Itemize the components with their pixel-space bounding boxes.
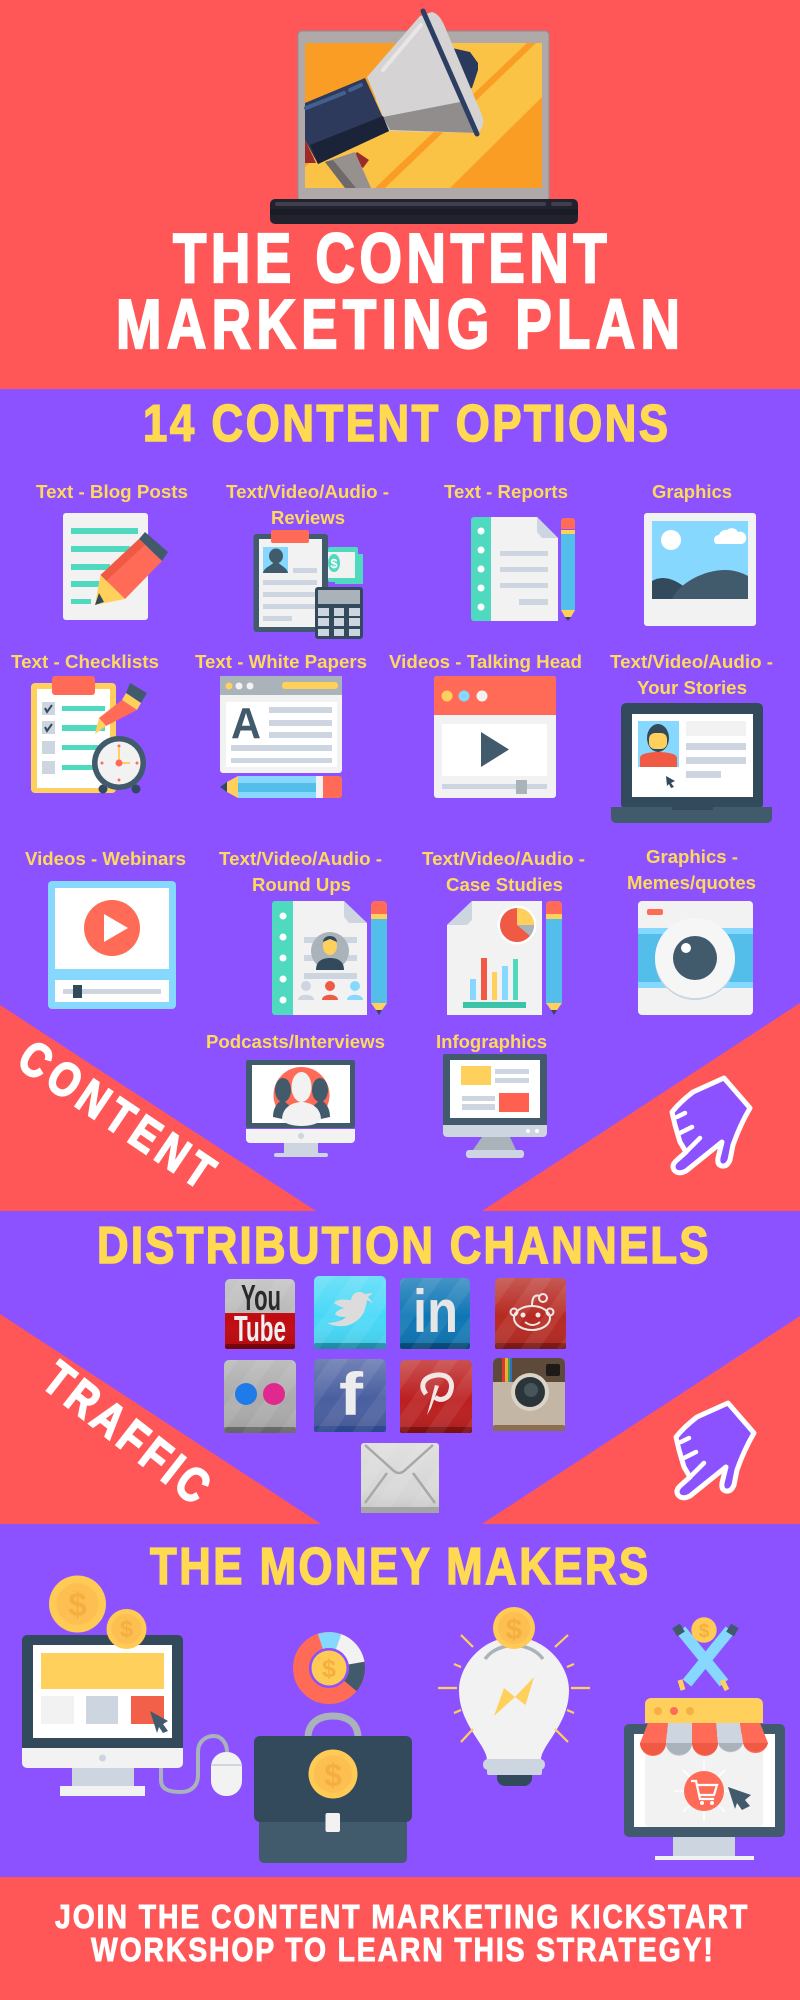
option: your stories: Text/Video/Audio - (610, 651, 773, 672)
icon: megaphone on laptop (270, 11, 578, 224)
option: reviews (226, 481, 389, 639)
banner: content triangle: CONTENT (9, 1030, 224, 1200)
option: case studies (422, 848, 585, 1015)
option: graphics (644, 481, 756, 626)
right triangle with hand icon (482, 1316, 800, 1524)
icon: online shop monitor with pencils and coin: $ (699, 1621, 710, 1642)
banner: traffic triangle: TRAFFIC (33, 1351, 220, 1514)
heading: distribution channels: DISTRIBUTION CHANNELS (97, 1218, 709, 1275)
icon: donut chart and briefcase: $ (324, 1757, 342, 1793)
option: checklists: Text - Checklists (11, 651, 159, 672)
title: THE CONTENT (173, 220, 607, 298)
panel: the money makers (0, 1524, 800, 1877)
option: your stories (610, 651, 773, 823)
icon: youtube: You (241, 1277, 281, 1318)
option: white papers: A (231, 699, 261, 748)
panel: footer call to action: WORKSHOP TO LEARN THIS STRATEGY! (91, 1931, 713, 1969)
option: checklists (11, 651, 159, 794)
option: round ups (219, 848, 387, 1015)
icon: small coin (106, 1609, 146, 1649)
option: graphics: Graphics (652, 481, 732, 502)
option: case studies: Text/Video/Audio - (422, 848, 585, 869)
option: memes and quotes: Graphics - (646, 846, 738, 867)
icon: donut chart and briefcase (254, 1632, 412, 1863)
option: blog posts: Text - Blog Posts (36, 481, 188, 502)
option: webinars (25, 848, 186, 1009)
option: webinars: Videos - Webinars (25, 848, 186, 869)
panel: 14 content options (0, 389, 800, 1211)
option: reports (444, 481, 575, 621)
heading: 14 content options: 14 CONTENT OPTIONS (143, 396, 668, 453)
option: reviews: Text/Video/Audio - (226, 481, 389, 502)
icon: online shop monitor with pencils and coin (624, 1617, 785, 1860)
option: reviews: Reviews (271, 507, 345, 528)
icon: small coin: $ (120, 1616, 133, 1642)
icon: desktop monitor with coins and mouse (22, 1576, 242, 1796)
title (116, 220, 680, 364)
option: talking head: Videos - Talking Head (389, 651, 582, 672)
icon: youtube (225, 1277, 295, 1349)
option: memes and quotes (627, 846, 756, 1015)
option: reports: Text - Reports (444, 481, 568, 502)
option: talking head (389, 651, 582, 798)
banner: traffic triangle (0, 1314, 321, 1524)
icon: pinterest (400, 1360, 472, 1433)
option: memes and quotes: Memes/quotes (627, 872, 756, 893)
option: blog posts (36, 481, 188, 620)
icon: twitter (314, 1276, 386, 1349)
icon: flickr (224, 1360, 296, 1433)
banner: content triangle (0, 1005, 316, 1211)
icon: facebook (314, 1359, 386, 1432)
icon: youtube: Tube (234, 1308, 286, 1349)
icon: email (361, 1443, 439, 1513)
icon: instagram (493, 1358, 565, 1431)
panel: footer call to action: JOIN THE CONTENT MARKETING KICKSTART (55, 1898, 747, 1936)
option: reviews: $ (330, 556, 338, 571)
icon: large coin: $ (68, 1586, 87, 1623)
icon: large coin (49, 1576, 106, 1632)
panel: footer call to action (0, 1877, 800, 2000)
option: round ups: Round Ups (252, 874, 351, 895)
option: white papers: Text - White Papers (195, 651, 367, 672)
option: infographics (436, 1031, 547, 1158)
heading: the money makers: THE MONEY MAKERS (150, 1539, 648, 1596)
panel: distribution channels (0, 1211, 800, 1524)
option: podcasts (206, 1031, 385, 1157)
option: white papers (195, 651, 367, 798)
icon: reddit (495, 1278, 566, 1349)
right triangle with hand icon (482, 1003, 800, 1211)
option: round ups: Text/Video/Audio - (219, 848, 382, 869)
title: MARKETING PLAN (116, 286, 680, 364)
icon: donut chart and briefcase: $ (322, 1655, 336, 1683)
icon: pointing hand (672, 1078, 750, 1173)
icon: linkedin: in (413, 1278, 458, 1345)
option: your stories: Your Stories (637, 677, 747, 698)
panel: hero header (0, 0, 800, 389)
icon: facebook: f (339, 1361, 364, 1428)
icon: pointing hand (676, 1403, 754, 1498)
icon: light bulb with coin: $ (506, 1614, 522, 1646)
option: infographics: Infographics (436, 1031, 547, 1052)
option: case studies: Case Studies (446, 874, 563, 895)
icon: light bulb with coin (438, 1607, 590, 1786)
option: podcasts: Podcasts/Interviews (206, 1031, 385, 1052)
